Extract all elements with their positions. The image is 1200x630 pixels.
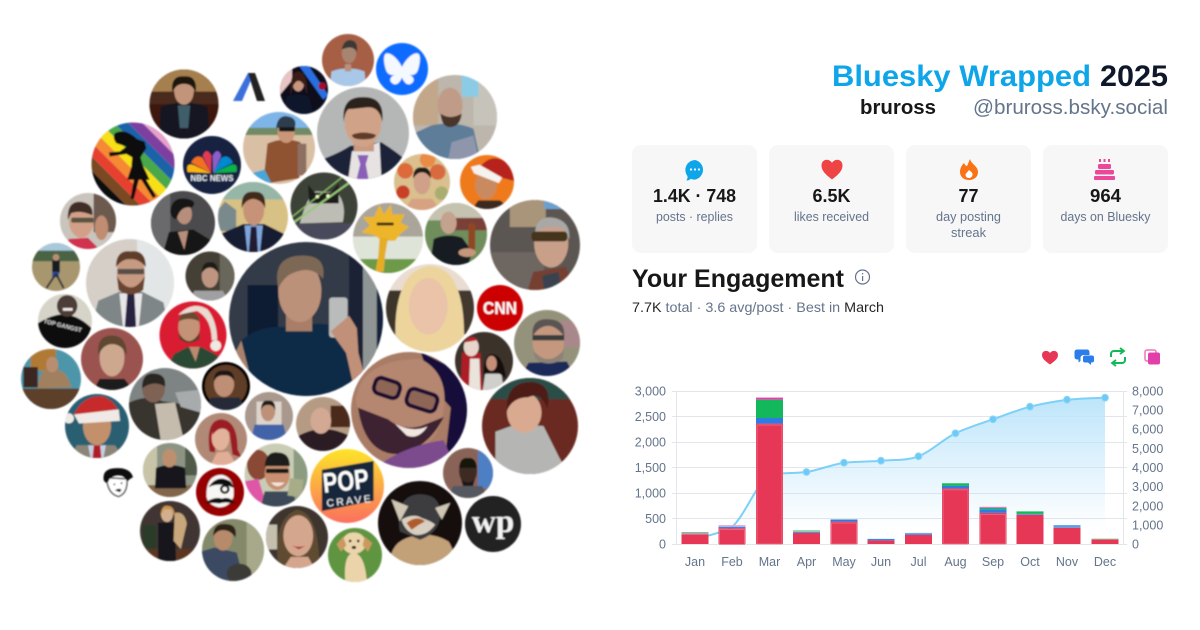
engagement summary: 7.7K total · 3.6 avg/post · Best in March — [632, 299, 884, 315]
right axis labels: 7,000 — [1132, 404, 1163, 418]
month labels: Sep — [982, 555, 1004, 569]
avatar: man in grey suit with glasses — [86, 239, 174, 327]
avatar cluster — [21, 34, 580, 583]
bar: Sep — [980, 507, 1006, 544]
icon: birthday cake — [1094, 159, 1115, 180]
line points — [803, 394, 1108, 475]
avatar: Pop Crave logo: POP — [321, 463, 370, 499]
left axis labels: 1,500 — [635, 461, 666, 475]
avatar: CNN logo: CNN — [483, 298, 517, 318]
stat card: posts and replies: 1.4K · 748 — [653, 186, 736, 206]
stat card: likes received: 6.5K — [812, 186, 850, 206]
bar: Mar — [756, 398, 783, 544]
icon: chat bubble — [685, 160, 703, 180]
bar: Aug — [942, 483, 969, 544]
avatar: grey-bearded man with glasses — [514, 310, 580, 376]
icon: replies — [1074, 350, 1094, 365]
bar: Jun — [868, 539, 894, 544]
month labels: Jul — [911, 555, 926, 569]
avatar: cyclist — [32, 243, 80, 291]
left axis labels: 0 — [659, 538, 666, 552]
avatar: man in blue plaid — [245, 392, 293, 440]
avatar: Pop Crave logo — [310, 449, 384, 523]
avatar: rainbow silhouette — [90, 122, 176, 207]
month labels: May — [832, 555, 857, 569]
month labels: Jan — [685, 555, 705, 569]
bar: Apr — [793, 530, 820, 544]
right axis labels: 6,000 — [1132, 423, 1163, 437]
stat card: posts and replies — [632, 145, 757, 253]
stat card: days on Bluesky — [1043, 145, 1168, 253]
avatar: woman on beach — [243, 112, 315, 184]
avatar: man in black tee — [143, 443, 197, 497]
title: Bluesky Wrapped 2025: 2025 — [1100, 60, 1168, 93]
left axis labels: 3,000 — [635, 384, 666, 398]
avatar: selfie with drag queen and money — [244, 444, 308, 506]
cumulative area — [695, 398, 1105, 544]
avatar: sun mascot at stadium — [353, 203, 423, 273]
icon: reposts — [1111, 348, 1125, 366]
chart: monthly engagement bars and cumulative line — [635, 384, 1163, 569]
avatar: man in purple glasses — [351, 352, 467, 468]
bar: Oct — [1016, 511, 1044, 544]
stat card: day posting streak: 77 — [958, 186, 978, 206]
avatar: cheerful glasses selfie — [60, 193, 116, 249]
avatar: man in dark coat with cat — [129, 368, 201, 440]
right axis labels: 2,000 — [1132, 499, 1163, 513]
avatar: man in suit at Capitol — [218, 182, 288, 252]
avatar: man in amber sunglasses — [490, 200, 580, 290]
bar: Jan — [682, 532, 708, 544]
stat card: day posting streak: streak — [951, 226, 987, 240]
month labels: Mar — [759, 555, 780, 569]
avatar: toddler — [482, 378, 578, 474]
heading: Your Engagement: Your Engagement — [632, 265, 845, 293]
avatar: red panda — [378, 481, 462, 565]
left axis labels — [635, 384, 666, 552]
right axis labels — [1132, 384, 1163, 552]
right axis labels: 0 — [1132, 538, 1139, 552]
avatar: Santa hat on orange — [460, 155, 514, 209]
avatar: golden retriever puppy — [328, 528, 382, 582]
avatar: Washington Post logo: wp — [472, 504, 514, 540]
avatar: NBC News logo: NBC NEWS — [191, 174, 233, 183]
bar: Nov — [1054, 525, 1080, 544]
right axis labels: 1,000 — [1132, 518, 1163, 532]
avatar: cartoon boy — [103, 468, 133, 496]
avatar: large selfie with phone — [229, 242, 383, 396]
right axis labels: 8,000 — [1132, 384, 1163, 398]
avatar: selfie on street — [413, 75, 497, 159]
month labels: Dec — [1094, 555, 1116, 569]
bar: Jul — [905, 533, 932, 544]
handle: @bruross.bsky.social — [973, 97, 1168, 119]
gridlines — [672, 391, 1127, 544]
bar: May — [830, 519, 858, 544]
avatar: man with cat outdoors — [202, 519, 264, 583]
avatar: man at desk — [21, 349, 81, 409]
avatar: man in dark jacket — [150, 70, 218, 138]
stat card: days on Bluesky: 964 — [1090, 186, 1121, 206]
avatar: floral background man — [394, 152, 450, 210]
icon: likes — [1042, 351, 1058, 364]
stat card: day posting streak — [906, 145, 1031, 253]
month labels: Jun — [871, 555, 891, 569]
avatar: woman on TV set — [280, 66, 328, 114]
bar: Feb — [718, 525, 746, 544]
month labels: Apr — [797, 555, 816, 569]
stat card: day posting streak: day posting — [936, 210, 1001, 224]
title: Bluesky Wrapped 2025: Bluesky Wrapped — [832, 60, 1091, 93]
month labels — [685, 555, 1116, 569]
month labels: Oct — [1020, 555, 1040, 569]
legend icons — [1042, 348, 1160, 366]
avatar: Santa hat man in green on red — [160, 302, 226, 368]
right axis labels: 3,000 — [1132, 480, 1163, 494]
month labels: Aug — [944, 555, 967, 569]
avatar: woman close-up — [266, 506, 328, 568]
avatar: A logo — [233, 73, 265, 101]
icon: info — [856, 270, 870, 284]
avatar: man with purple tie — [317, 87, 409, 179]
left axis labels: 1,000 — [635, 486, 666, 500]
month labels: Feb — [721, 555, 743, 569]
avatar: cat with laser eyes — [290, 172, 358, 240]
left axis labels: 2,500 — [635, 410, 666, 424]
avatar: NBC News logo — [183, 136, 241, 194]
avatar: man under Santa hat — [64, 394, 129, 458]
avatar: hoodie with corn dog — [425, 203, 487, 265]
right axis labels: 5,000 — [1132, 442, 1163, 456]
stat card: posts and replies: posts · replies — [656, 210, 733, 224]
avatar: Natty Boh logo — [196, 468, 244, 516]
avatar: Bluesky butterfly logo — [376, 43, 428, 95]
stat card: likes received — [769, 145, 894, 253]
bar: Dec — [1092, 539, 1118, 544]
avatar: smiling man with black ring — [202, 362, 250, 410]
icon: heart — [822, 160, 842, 180]
avatar: Washington Post logo — [465, 496, 521, 552]
stat card: likes received: likes received — [794, 210, 869, 224]
left axis labels: 2,000 — [635, 436, 666, 450]
avatar: man against red siding — [81, 328, 143, 390]
stat card: days on Bluesky: days on Bluesky — [1060, 210, 1151, 224]
right axis labels: 4,000 — [1132, 461, 1163, 475]
avatar: man in gray hoodie — [443, 448, 493, 498]
cumulative line — [695, 398, 1105, 539]
avatar: blonde woman looking up — [386, 264, 474, 352]
icon: quotes — [1145, 350, 1160, 364]
icon: flame — [960, 159, 978, 180]
avatar: Santa with woman — [455, 332, 513, 390]
avatar: man in grey tee — [186, 252, 234, 300]
avatar: man with black printed shirt: TOP GANGST — [43, 319, 83, 334]
month labels: Nov — [1056, 555, 1079, 569]
bars — [682, 398, 1118, 544]
left axis labels: 500 — [645, 512, 666, 526]
avatar: woman in dark blazer — [151, 191, 215, 255]
avatar: bald man — [296, 397, 350, 451]
avatar: man at brick wall — [322, 34, 374, 86]
avatar: red-haired woman — [195, 413, 247, 465]
avatar: man with black printed shirt — [38, 294, 92, 348]
avatar: CNN logo — [477, 285, 523, 331]
avatar: Pop Crave logo: CRAVE — [326, 494, 371, 510]
display name: bruross — [860, 97, 936, 119]
avatar: woman with dog — [140, 501, 200, 561]
